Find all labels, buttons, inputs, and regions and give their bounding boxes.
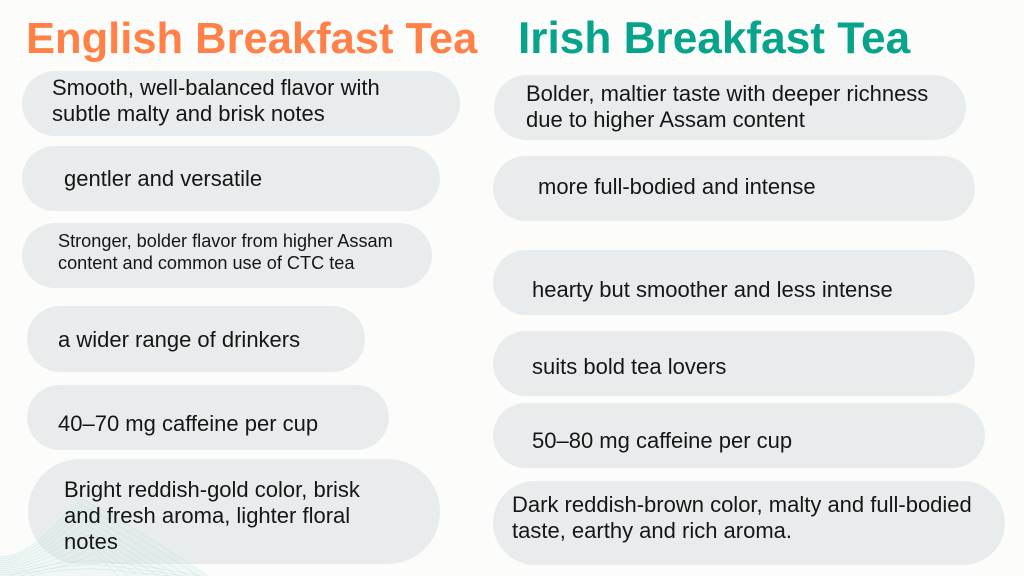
text: Irish strength: hearty but smoother and less intense xyxy=(532,277,893,302)
panel: Irish audience xyxy=(493,331,975,396)
text: Irish caffeine: 50–80 mg caffeine per cup xyxy=(532,428,792,453)
text: Irish flavor: due to higher Assam content xyxy=(526,107,805,132)
text: English flavor xyxy=(52,75,380,126)
text: Irish flavor: Bolder, maltier taste with deeper richness xyxy=(526,81,928,106)
text: Irish appearance: Dark reddish-brown color, malty and full-bodied xyxy=(512,492,972,517)
text: English strength xyxy=(58,231,393,273)
heading: Irish Breakfast Tea: Irish Breakfast Tea xyxy=(518,14,910,63)
text: Irish character: more full-bodied and intense xyxy=(538,174,816,199)
text: English audience: a wider range of drinkers xyxy=(58,327,300,352)
text: Irish appearance: taste, earthy and rich aroma. xyxy=(512,518,792,543)
text: Irish flavor xyxy=(526,81,928,132)
panel: English appearance xyxy=(28,459,440,564)
panel: Irish caffeine xyxy=(493,403,985,468)
text: Irish appearance xyxy=(512,492,972,543)
panel: Irish flavor xyxy=(494,75,966,140)
text: English flavor: subtle malty and brisk notes xyxy=(52,101,325,126)
text: English appearance: and fresh aroma, lighter floral xyxy=(64,503,350,528)
panel: English flavor xyxy=(22,71,460,136)
text: English strength: content and common use of CTC tea xyxy=(58,253,354,273)
heading: English Breakfast Tea: English Breakfast Tea xyxy=(26,15,477,63)
panel: Irish appearance xyxy=(493,481,1005,565)
text: English appearance: Bright reddish-gold color, brisk xyxy=(64,477,360,502)
panel: English caffeine xyxy=(27,385,389,450)
panel: Irish strength xyxy=(493,250,975,315)
text: English flavor: Smooth, well-balanced flavor with xyxy=(52,75,380,100)
text: English strength: Stronger, bolder flavor from higher Assam xyxy=(58,231,393,251)
panel: Irish character xyxy=(493,156,975,221)
text: English character: gentler and versatile xyxy=(64,166,262,191)
panel: English character xyxy=(22,146,440,211)
text: Irish audience: suits bold tea lovers xyxy=(532,354,726,379)
panel: English strength xyxy=(22,223,432,288)
panel: English audience xyxy=(27,306,365,372)
text: English caffeine: 40–70 mg caffeine per cup xyxy=(58,411,318,436)
text: English appearance xyxy=(64,477,360,554)
text: English appearance: notes xyxy=(64,529,118,554)
